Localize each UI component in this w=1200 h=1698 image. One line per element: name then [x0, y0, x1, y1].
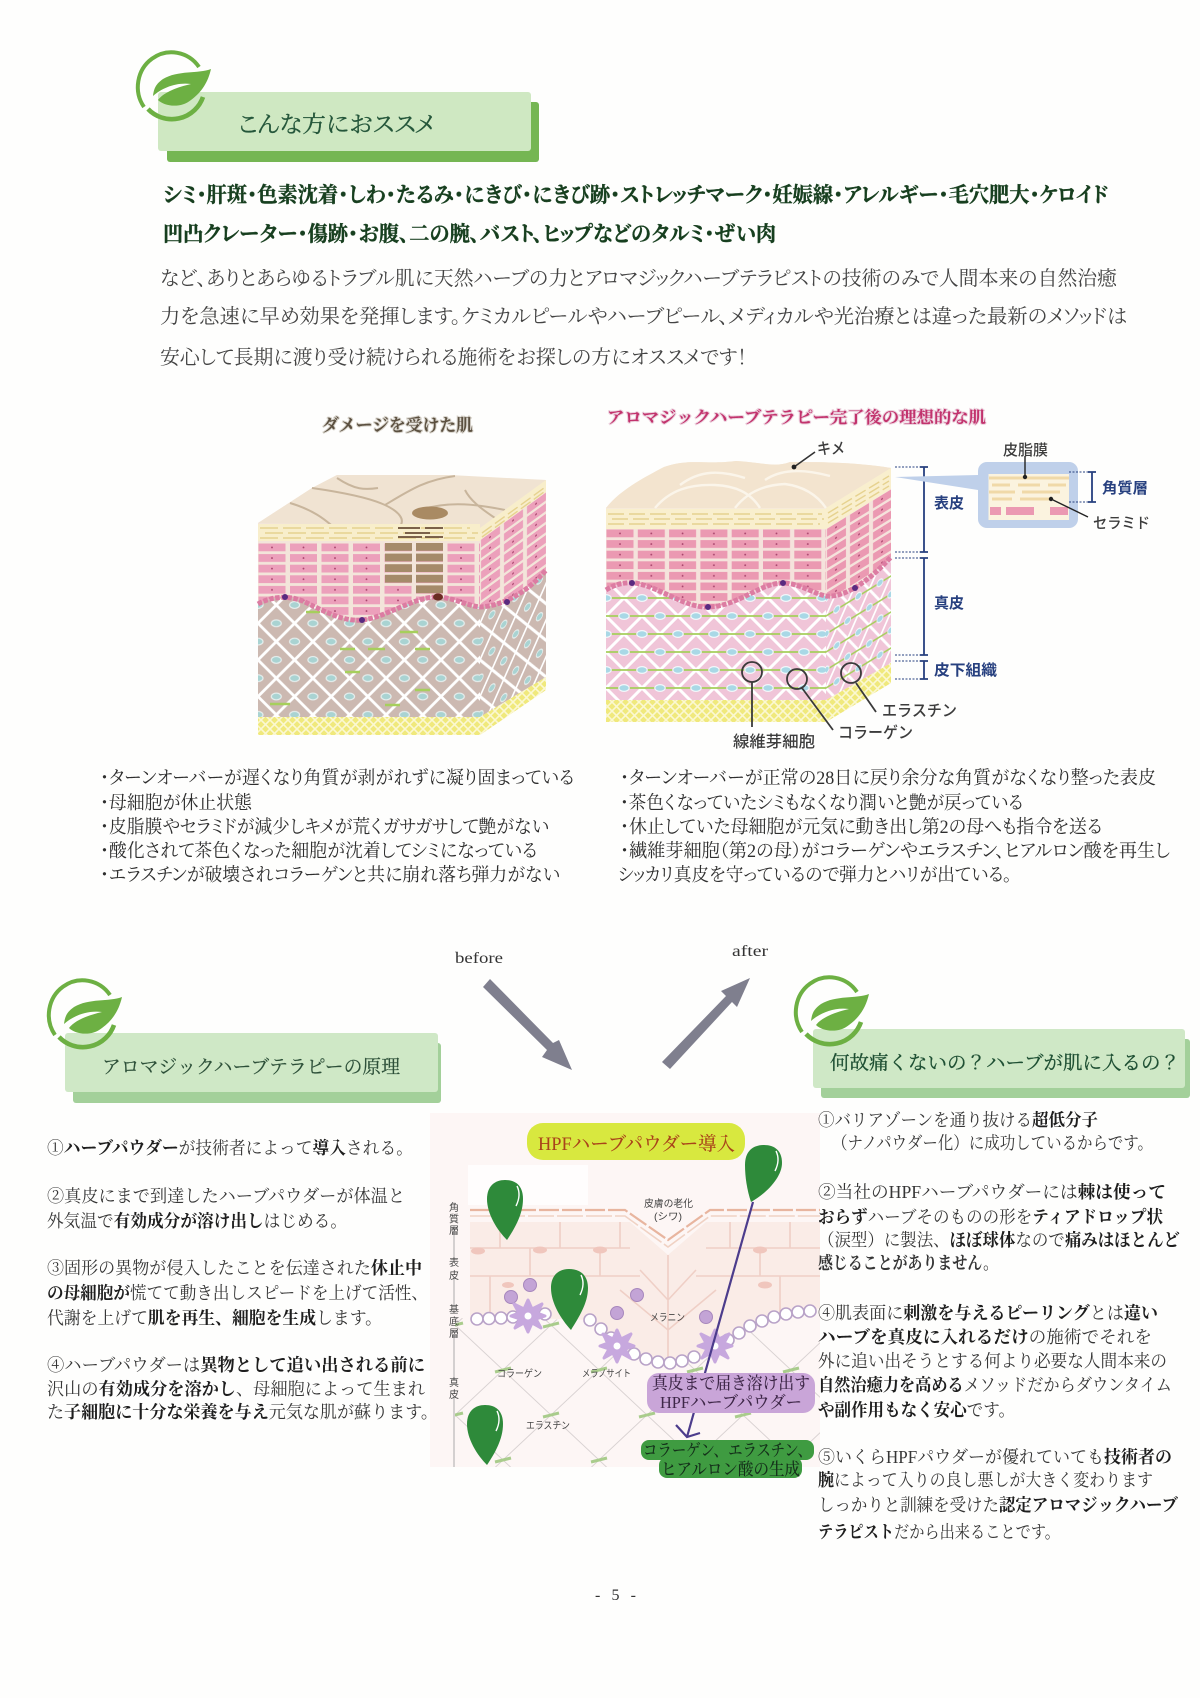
melanin	[504, 1278, 712, 1324]
layer brackets: 表皮	[934, 494, 964, 512]
icon: teardrop 3	[467, 1405, 503, 1465]
inset: stratum corneum detail: 皮脂膜	[1003, 441, 1048, 459]
small labels: メラニン	[650, 1312, 685, 1324]
diagram: ideal skin block	[606, 441, 957, 751]
small labels: 真	[449, 1376, 459, 1389]
trouble list in bold green	[163, 183, 1108, 246]
callout: dissolves reaching dermis	[647, 1373, 815, 1413]
list: ideal skin points: ･茶色くなっていたシミもなくなり潤いと艶が戻っている	[620, 793, 1023, 814]
text block: why no pain explanation: ④肌表面に刺激を与えるピーリングとは違い	[818, 1303, 1158, 1323]
arrow: after	[662, 978, 750, 1069]
axis	[453, 1226, 455, 1467]
text block: why no pain explanation: ⑤いくらHPFパウダーが優れていても技術者の	[818, 1447, 1172, 1467]
text block: principle steps: 沢山の有効成分を溶かし、母細胞によって生まれ	[47, 1379, 425, 1399]
text block: why no pain explanation: 外に追い出そうとする何より必要な人間本来の	[818, 1351, 1167, 1371]
small labels	[449, 1197, 693, 1432]
heading: principle	[49, 980, 441, 1103]
callout: collagen generation: ヒアルロン酸の生成	[661, 1460, 800, 1479]
intro paragraph	[160, 267, 1127, 369]
label: HPF powder introduction: HPFハーブパウダー導入	[538, 1132, 735, 1155]
text block: principle steps: 代謝を上げて肌を再生、細胞を生成します。	[47, 1308, 382, 1328]
list: damaged skin points: ･母細胞が休止状態	[100, 793, 252, 814]
small labels: 質	[449, 1212, 459, 1226]
label: HPF powder introduction	[527, 1123, 745, 1160]
small labels: 層	[449, 1328, 459, 1340]
trouble list in bold green: 凹凸クレーター・傷跡・お腹、二の腕、バスト、ヒップなどのタルミ・ぜい肉	[163, 222, 776, 246]
text block: principle steps: ①ハーブパウダーが技術者によって導入される。	[47, 1138, 413, 1158]
epidermis cells	[470, 1220, 820, 1365]
text block: principle steps	[47, 1138, 438, 1422]
text block: principle steps: ③固形の異物が侵入したことを伝達された休止中	[47, 1258, 422, 1278]
callout: dissolves reaching dermis: HPFハーブパウダー	[660, 1393, 802, 1412]
layer brackets: 皮下組織	[934, 661, 997, 679]
layer brackets	[895, 467, 997, 679]
text block: why no pain explanation: （涙型）に製法、ほぼ球体なので痛みはほとんど	[818, 1230, 1180, 1250]
labels: fibre circles	[742, 662, 876, 730]
list: ideal skin points	[618, 768, 1170, 886]
text block: why no pain explanation: （ナノパウダー化）に成功しているからです。	[832, 1133, 1153, 1153]
small labels: 皮膚の老化	[644, 1197, 693, 1210]
small labels: コラーゲン	[497, 1368, 542, 1380]
page number: - 5 -	[595, 1587, 636, 1604]
text block: why no pain explanation: おらずハーブそのものの形をティアドロップ状	[818, 1207, 1163, 1227]
trouble list in bold green: シミ・肝斑・色素沈着・しわ・たるみ・にきび・にきび跡・ストレッチマーク・妊娠線・アレルギー・毛穴肥大・ケロイド	[163, 183, 1108, 207]
text block: principle steps: の母細胞が慌てて動き出しスピードを上げて活性、	[47, 1283, 428, 1303]
inset: stratum corneum detail: 角質層	[1102, 479, 1148, 497]
melanocytes	[511, 1300, 732, 1362]
small labels: 表	[449, 1257, 459, 1269]
callout: collagen generation	[641, 1440, 814, 1479]
text block: why no pain explanation	[818, 1110, 1180, 1542]
intro paragraph: 力を急速に早め効果を発揮します。ケミカルピールやハーブピール、メディカルや光治療とは違った最新のメソッドは	[160, 305, 1127, 328]
list: ideal skin points: ･ターンオーバーが正常の28日に戻り余分な角質がなくなり整った表皮	[620, 768, 1156, 789]
wrinkle strata	[470, 1210, 820, 1240]
list: damaged skin points: ･ターンオーバーが遅くなり角質が剥がれずに凝り固まっている	[100, 768, 574, 789]
list: damaged skin points: ･エラスチンが破壊されコラーゲンと共に崩れ落ち弾力がない	[100, 865, 560, 886]
text block: why no pain explanation: 感じることがありません。	[818, 1253, 998, 1273]
small labels: 皮	[449, 1269, 459, 1282]
list: ideal skin points: ･休止していた母細胞が元気に動き出し第2の母へも指令を送る	[620, 817, 1102, 838]
text block: why no pain explanation: ②当社のHPFハーブパウダーには棘は使って	[818, 1182, 1166, 1202]
small labels: メラノサイト	[582, 1368, 631, 1380]
list: damaged skin points: ･皮脂膜やセラミドが減少しキメが荒くガサガサして艶がない	[100, 817, 549, 838]
text block: why no pain explanation: テラピストだから出来ることです。	[818, 1522, 1060, 1542]
diagram: damaged skin block	[258, 475, 546, 735]
text block: why no pain explanation: 自然治癒力を高めるメソッドだからダウンタイム	[818, 1375, 1172, 1395]
intro paragraph: など、ありとあらゆるトラブル肌に天然ハーブの力とアロマジックハーブテラピストの技術のみで人間本来の自然治癒	[160, 267, 1118, 290]
label: texture: キメ	[817, 441, 845, 458]
small labels: エラスチン	[526, 1420, 570, 1432]
title: ideal skin after therapy: アロマジックハーブテラピー完了後の理想的な肌	[607, 407, 987, 427]
inset: stratum corneum detail	[895, 441, 1150, 532]
small labels: 角	[449, 1201, 459, 1214]
text block: why no pain explanation: ①バリアゾーンを通り抜ける超低分子	[818, 1110, 1098, 1130]
label: after: after	[732, 943, 769, 960]
list: damaged skin points: ･酸化されて茶色くなった細胞が沈着してシミになっている	[100, 841, 537, 862]
diagram: HPF herb powder	[430, 1113, 820, 1479]
small labels: 皮	[449, 1388, 459, 1401]
label: fibroblast: 線維芽細胞	[733, 733, 815, 751]
inset: stratum corneum detail: セラミド	[1093, 515, 1150, 532]
text block: why no pain explanation: や副作用もなく安心です。	[818, 1400, 1015, 1420]
small labels: 底	[449, 1316, 459, 1328]
icon: teardrop 1	[487, 1180, 523, 1240]
small labels: 層	[449, 1225, 459, 1237]
arrow: powder path	[676, 1202, 753, 1437]
heading: why no pain	[796, 977, 1190, 1098]
arrow: before	[483, 979, 572, 1070]
text block: principle steps: た子細胞に十分な栄養を与え元気な肌が蘇ります。	[47, 1402, 438, 1422]
basal cells	[471, 1305, 816, 1369]
heading: principle: アロマジックハーブテラピーの原理	[102, 1056, 400, 1078]
icon: teardrop 2	[551, 1269, 588, 1330]
layer brackets: 真皮	[934, 594, 964, 612]
text block: principle steps: 外気温で有効成分が溶け出しはじめる。	[47, 1211, 347, 1231]
callout: collagen generation: コラーゲン、エラスチン、	[643, 1441, 812, 1460]
text block: why no pain explanation: 腕によって入りの良し悪しが大きく変わります	[818, 1470, 1153, 1490]
small labels: 基	[449, 1303, 459, 1316]
callout: dissolves reaching dermis: 真皮まで届き溶け出す	[652, 1374, 810, 1393]
title: damaged skin: ダメージを受けた肌	[322, 416, 473, 435]
intro paragraph: 安心して長期に渡り受け続けられる施術をお探しの方にオススメです！	[160, 346, 747, 369]
text block: principle steps: ②真皮にまで到達したハーブパウダーが体温と	[47, 1186, 405, 1206]
dermis lattice	[455, 1310, 820, 1467]
text block: why no pain explanation: しっかりと訓練を受けた認定アロマジックハーブ	[818, 1495, 1178, 1515]
label: collagen: コラーゲン	[838, 724, 913, 742]
list: ideal skin points: ･繊維芽細胞（第2の母）がコラーゲンやエラスチン、ヒアルロン酸を再生し	[620, 841, 1170, 862]
label: before: before	[455, 950, 503, 967]
label: texture	[792, 441, 845, 469]
label: elastin: エラスチン	[882, 703, 957, 720]
heading: recommended for	[138, 52, 539, 162]
text block: why no pain explanation: ハーブを真皮に入れるだけの施術でそれを	[818, 1327, 1152, 1347]
small labels: (シワ)	[654, 1212, 682, 1223]
list: damaged skin points	[100, 768, 574, 886]
heading: recommended for: こんな方におススメ	[238, 112, 435, 137]
heading: why no pain: 何故痛くないの？ハーブが肌に入るの？	[830, 1052, 1180, 1074]
icon: teardrop 4	[745, 1145, 782, 1202]
list: ideal skin points: シッカリ真皮を守っているので弾力とハリが出ている。	[618, 865, 1012, 886]
text block: principle steps: ④ハーブパウダーは異物として追い出される前に	[47, 1355, 425, 1375]
